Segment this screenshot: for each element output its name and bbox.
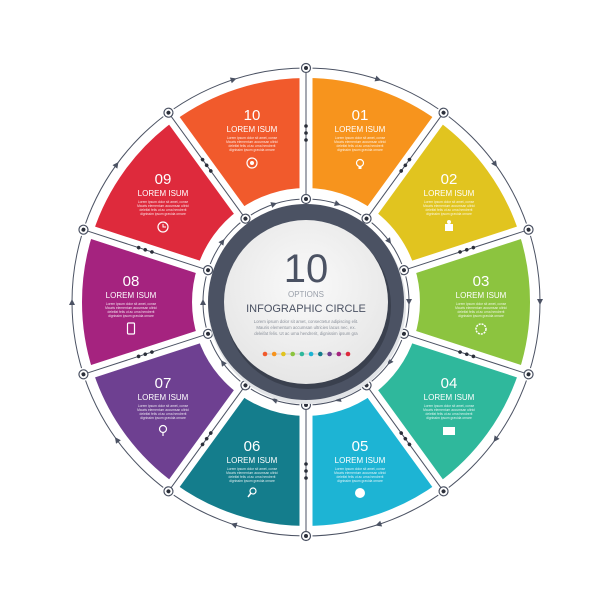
text: 02 xyxy=(441,171,457,188)
text: 03 xyxy=(473,273,489,290)
text: Mauris elementum accumsan ultrici xyxy=(105,306,157,310)
text: LOREM ISUM xyxy=(424,189,475,198)
text: deleifat felis ut ac urna hendrerit xyxy=(229,144,276,148)
connector rings xyxy=(72,68,540,536)
text: LOREM ISUM xyxy=(138,189,189,198)
center title: 10 xyxy=(284,247,328,291)
text: dignissim ipsum gravida ornare xyxy=(426,416,472,420)
text: Mauris elementum accumsan ultrici xyxy=(455,306,507,310)
text: LOREM ISUM xyxy=(106,291,157,300)
text: Lorem ipsum dolor sit amet, conse xyxy=(227,467,277,471)
text: LOREM ISUM xyxy=(138,393,189,402)
wedges xyxy=(52,43,560,561)
center hub xyxy=(208,204,406,404)
segment texts: 01 xyxy=(352,107,368,124)
text: Lorem ipsum dolor sit amet, conse xyxy=(335,467,385,471)
text: dignissim ipsum gravida ornare xyxy=(229,148,275,152)
arrows xyxy=(67,74,545,530)
segment texts xyxy=(334,107,386,169)
text: Lorem ipsum dolor sit amet, conse xyxy=(106,302,156,306)
text: deleifat felis ut ac urna hendrerit xyxy=(108,310,155,314)
text: LOREM ISUM xyxy=(456,291,507,300)
text: Mauris elementum accumsan ultrici xyxy=(137,204,189,208)
text: Mauris elementum accumsan ultrici xyxy=(226,140,278,144)
segment texts: dignissim ipsum gravida ornare xyxy=(337,148,383,152)
text: deleifat felis ut ac urna hendrerit xyxy=(426,208,473,212)
text: dignissim ipsum gravida ornare xyxy=(108,314,154,318)
text: Lorem ipsum dolor sit amet, conse xyxy=(138,404,188,408)
boundary connectors xyxy=(78,64,534,540)
center hub: INFOGRAPHIC CIRCLE xyxy=(246,303,366,315)
text: Lorem ipsum dolor sit amet, conse xyxy=(138,200,188,204)
text: LOREM ISUM xyxy=(227,125,278,134)
text: Lorem ipsum dolor sit amet, conse xyxy=(456,302,506,306)
text: Lorem ipsum dolor sit amet, conse xyxy=(424,200,474,204)
text: LOREM ISUM xyxy=(227,456,278,465)
text: Mauris elementum accumsan ultrici xyxy=(137,408,189,412)
text: dignissim ipsum gravida ornare xyxy=(140,416,186,420)
text: LOREM ISUM xyxy=(335,456,386,465)
text: deleifat felis ut ac urna hendrerit xyxy=(337,475,384,479)
text: deleifat felis ut ac urna hendrerit xyxy=(229,475,276,479)
text: deleifat felis ut ac urna hendrerit xyxy=(426,412,473,416)
center body text: deleifat felis. Ut ac urna hendrerit, dignissim ipsum gra xyxy=(254,331,358,336)
text: dignissim ipsum gravida ornare xyxy=(337,479,383,483)
text: deleifat felis ut ac urna hendrerit xyxy=(458,310,505,314)
center hub: OPTIONS xyxy=(288,290,324,299)
text: Lorem ipsum dolor sit amet, conse xyxy=(424,404,474,408)
text: Mauris elementum accumsan ultrici xyxy=(334,471,386,475)
text: Lorem ipsum dolor sit amet, conse xyxy=(227,136,277,140)
text: 05 xyxy=(352,438,368,455)
segment texts: Lorem ipsum dolor sit amet, conse xyxy=(335,136,385,140)
text: deleifat felis ut ac urna hendrerit xyxy=(140,412,187,416)
text: dignissim ipsum gravida ornare xyxy=(229,479,275,483)
segment texts: deleifat felis ut ac urna hendrerit xyxy=(337,144,384,148)
text: Mauris elementum accumsan ultrici xyxy=(423,204,475,208)
center body text: Lorem ipsum dolor sit amet, consectetur adipiscing elit. xyxy=(254,319,358,324)
segment texts: LOREM ISUM xyxy=(335,125,386,134)
text: 10 xyxy=(244,107,260,124)
text: Mauris elementum accumsan ultrici xyxy=(423,408,475,412)
center body text: Mauris elementum accumsan ultricies lacus nec, ex. xyxy=(256,325,356,330)
text: 06 xyxy=(244,438,260,455)
text: dignissim ipsum gravida ornare xyxy=(426,212,472,216)
text: 09 xyxy=(155,171,171,188)
text: dignissim ipsum gravida ornare xyxy=(458,314,504,318)
color dots xyxy=(263,352,350,356)
text: 07 xyxy=(155,375,171,392)
text: dignissim ipsum gravida ornare xyxy=(140,212,186,216)
text: LOREM ISUM xyxy=(424,393,475,402)
text: 08 xyxy=(123,273,139,290)
text: 04 xyxy=(441,375,457,392)
text: deleifat felis ut ac urna hendrerit xyxy=(140,208,187,212)
center body text xyxy=(254,319,358,336)
text: Mauris elementum accumsan ultrici xyxy=(226,471,278,475)
segment texts: Mauris elementum accumsan ultrici xyxy=(334,140,386,144)
